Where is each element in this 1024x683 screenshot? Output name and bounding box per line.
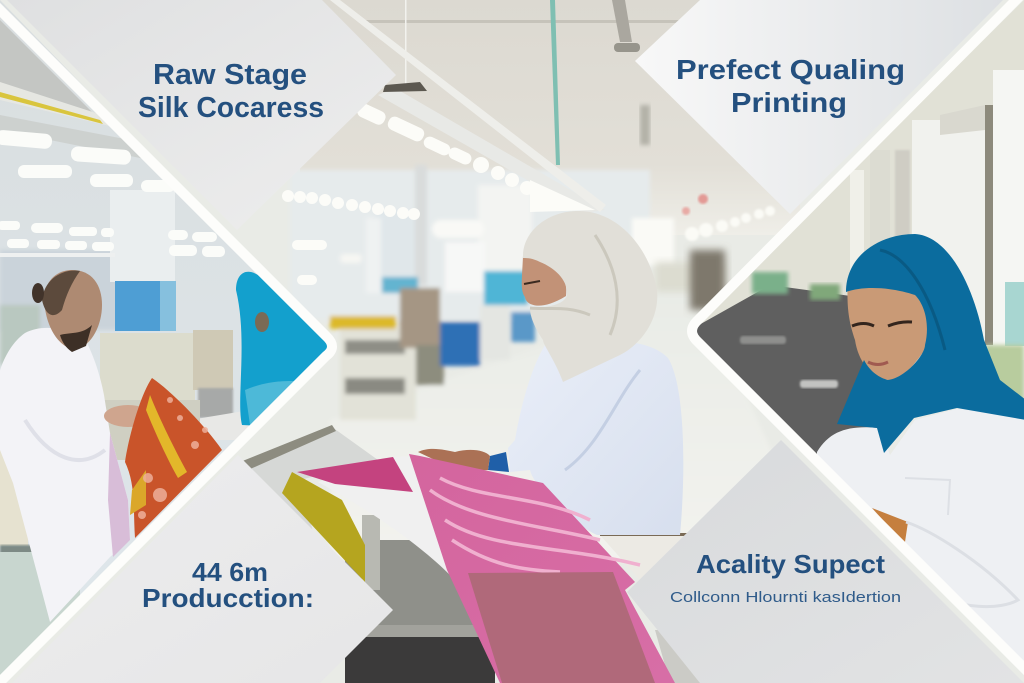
head (44, 270, 102, 350)
overhead beam and lights (282, 0, 606, 285)
hands (418, 449, 490, 470)
worker: centre woman (418, 211, 683, 535)
printed floral panel (468, 572, 655, 683)
pink fabric on table (297, 454, 675, 683)
ceiling (300, 0, 800, 235)
lab coat (817, 408, 1024, 683)
scarf (523, 211, 657, 382)
heading: acality supect: Acality Supect (696, 549, 885, 579)
left hall region (0, 0, 257, 675)
worker: right woman (817, 234, 1024, 683)
face (522, 256, 566, 306)
arm (872, 508, 908, 542)
far end of hall (632, 194, 775, 310)
panel: raw stage (7, 0, 396, 230)
panel: quality inspect (627, 440, 1024, 683)
background worker in blue (236, 272, 327, 426)
face (847, 280, 928, 380)
heading: production: Producction: (142, 583, 314, 613)
hijab (837, 234, 1024, 453)
heading: prefect qualing printing: Prefect Qualing (676, 54, 905, 85)
heading: raw stage silk cocaress: Silk Cocaress (138, 92, 324, 124)
panel: prefect qualing printing (635, 0, 1003, 214)
lab coat (0, 328, 130, 622)
heading: production: 44 6m (192, 557, 268, 587)
heading: raw stage silk cocaress: Raw Stage (153, 59, 307, 91)
panel: production (12, 455, 393, 683)
caption: Collconn Hlournti kasIdertion (670, 589, 901, 606)
sleeve cuff (488, 452, 509, 472)
right hall region (690, 0, 1024, 470)
worker: man left (0, 270, 152, 622)
coat shadow strip (108, 433, 130, 557)
centre hall (290, 165, 780, 560)
printing table (240, 425, 715, 683)
lab coat (508, 341, 683, 535)
colourful fabric held by man (125, 378, 222, 538)
heading: prefect qualing printing: Printing (731, 87, 847, 118)
